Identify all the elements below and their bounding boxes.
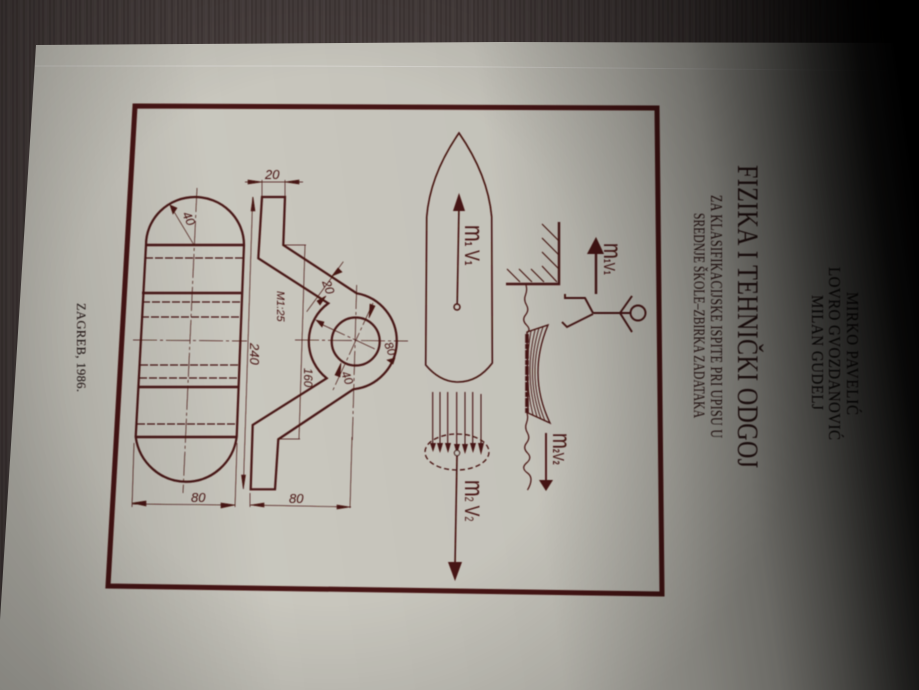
- dimension: radius 40: 40: [179, 209, 198, 228]
- printed frame border: [108, 106, 662, 594]
- dimension: height 160: 160: [301, 368, 313, 388]
- stick figure jumping: [562, 294, 646, 332]
- technical drawing: front view: [132, 188, 247, 508]
- dimension: width 80: 80: [191, 490, 206, 505]
- dimension: radius 80: 80: [381, 340, 399, 358]
- exhaust jet with momentum arrow: [425, 392, 489, 581]
- dimension: width 20: 20: [264, 167, 280, 182]
- title: FIZIKA I TEHNIČKI ODGOJ: [731, 165, 765, 468]
- arrow: man momentum: [587, 237, 626, 294]
- dimension: height 240: 240: [247, 342, 262, 365]
- subtitle line 1: ZA KLASIFIKACIJSKE ISPITE PRI UPISU U: [706, 195, 725, 438]
- dimension: bore 40: 40: [338, 369, 356, 387]
- author: Milan Gudelj: MILAN GUDELJ: [808, 295, 826, 410]
- hatched wall corner: [506, 222, 559, 284]
- curved boat with hatching: [527, 325, 550, 423]
- technical drawing: side view bracket: [242, 167, 408, 509]
- dimension: width 80 lower: 80: [289, 491, 304, 506]
- rocket hull with momentum arrow: [426, 133, 492, 382]
- label: m1 v1 on rocket: m 1 V 1: [459, 225, 489, 265]
- arrow: boat momentum: [539, 433, 575, 491]
- label: m2 v2 boat: m 2 V 2: [547, 433, 575, 465]
- subtitle line 2: SREDNJE ŠKOLE–ZBIRKA ZADATAKA: [689, 213, 709, 418]
- author: Lovro Gvozdanović: LOVRO GVOZDANOVIĆ: [825, 267, 845, 440]
- dimension: scale: M1:25: [274, 291, 286, 322]
- label: m2 v2 on jet: m 2 V 2: [459, 480, 489, 522]
- label: m1 v1 man: m 1 V 1: [598, 243, 626, 275]
- author: Mirko Pavelić: MIRKO PAVELIĆ: [843, 292, 863, 415]
- wavy water surface: [524, 285, 531, 490]
- dimension: thickness 20: 20: [319, 277, 337, 296]
- publisher place and year: ZAGREB, 1986.: [74, 303, 88, 392]
